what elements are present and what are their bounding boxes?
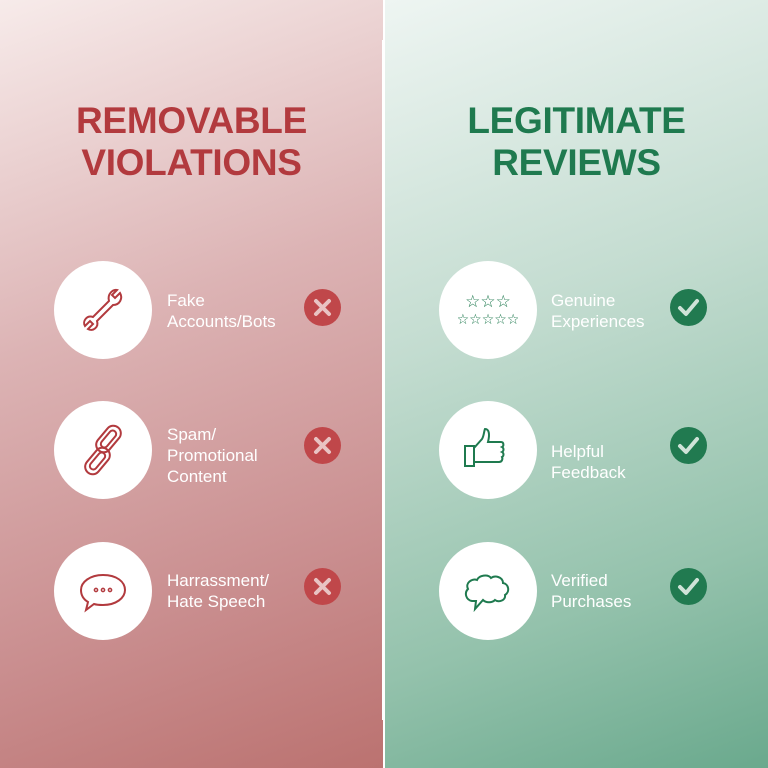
- title: legitimate reviews: REVIEWS: [492, 142, 661, 183]
- text: helpful feedback: Helpful: [551, 442, 604, 461]
- title: legitimate reviews: LEGITIMATE: [467, 100, 686, 141]
- icon: cloud bubble: [439, 542, 537, 640]
- icon: chain link: [54, 401, 152, 499]
- text: verified purchases: [551, 571, 631, 611]
- icon: x badge 3: [304, 568, 341, 605]
- icon: stars: ☆☆☆: [465, 292, 511, 312]
- panel: legitimate reviews: [385, 0, 768, 768]
- text: helpful feedback: [551, 442, 626, 482]
- title: removable violations: REMOVABLE: [76, 100, 307, 141]
- panel: removable violations: [0, 0, 383, 768]
- text: fake accounts: Fake: [167, 291, 205, 310]
- text: spam: Content: [167, 467, 227, 486]
- icon: wrench: [54, 261, 152, 359]
- title: legitimate reviews: [467, 100, 686, 183]
- text: harassment: Harrassment/: [167, 571, 269, 590]
- text: genuine experiences: Experiences: [551, 312, 645, 331]
- icon: check badge 1: [670, 289, 707, 326]
- title: removable violations: VIOLATIONS: [81, 142, 302, 183]
- icon: thumbs up: [439, 401, 537, 499]
- text: helpful feedback: Feedback: [551, 463, 626, 482]
- text: spam: Spam/: [167, 425, 216, 444]
- icon: stars: [439, 261, 537, 359]
- text: spam: [167, 425, 258, 486]
- text: harassment: [167, 571, 269, 611]
- icon: speech bubble: [54, 542, 152, 640]
- text: genuine experiences: Genuine: [551, 291, 615, 310]
- text: verified purchases: Verified: [551, 571, 608, 590]
- text: verified purchases: Purchases: [551, 592, 631, 611]
- text: harassment: Hate Speech: [167, 592, 265, 611]
- text: spam: Promotional: [167, 446, 258, 465]
- title: removable violations: [76, 100, 307, 183]
- icon: check badge 3: [670, 568, 707, 605]
- text: fake accounts: [167, 291, 276, 331]
- icon: x badge 2: [304, 427, 341, 464]
- icon: x badge 1: [304, 289, 341, 326]
- text: fake accounts: Accounts/Bots: [167, 312, 276, 331]
- icon: check badge 2: [670, 427, 707, 464]
- text: genuine experiences: [551, 291, 645, 331]
